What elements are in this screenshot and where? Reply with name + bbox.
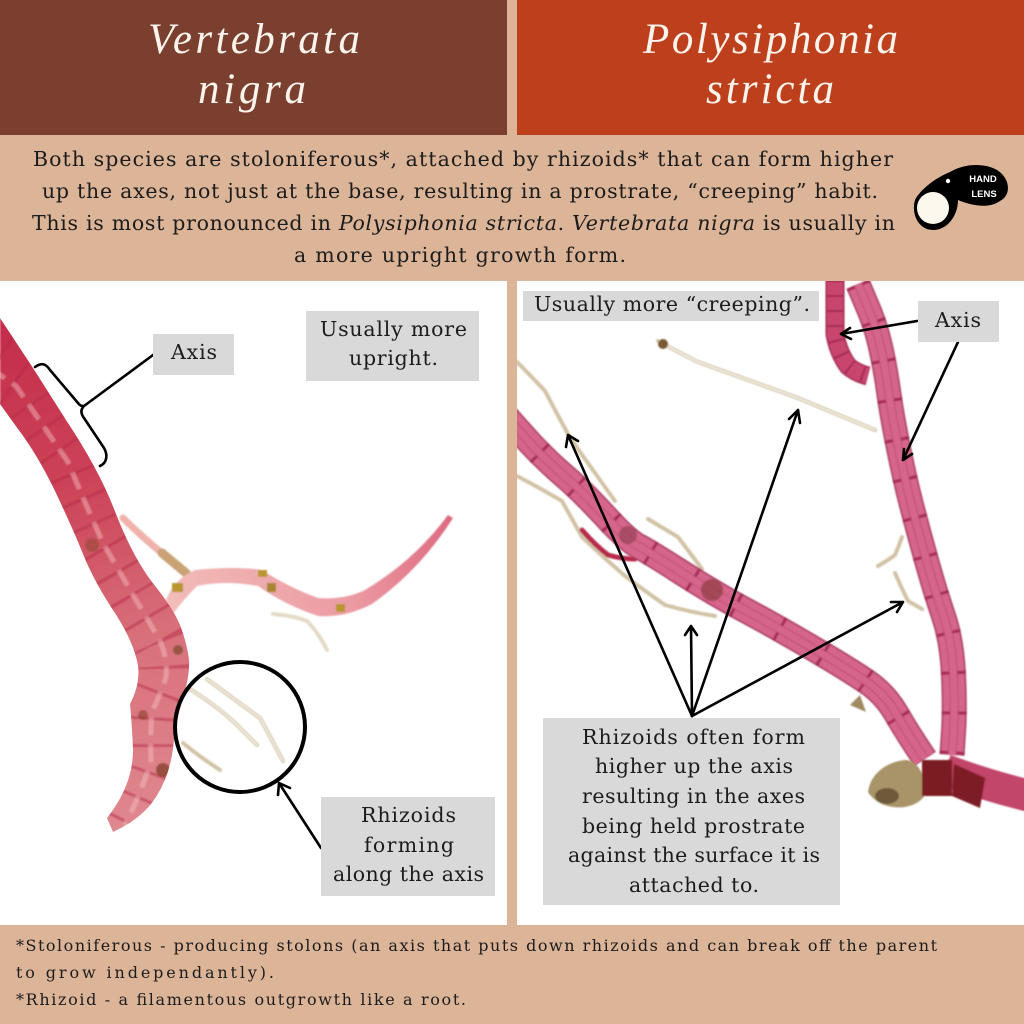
label: rhizoids often form higher <box>543 718 840 905</box>
illustration: holdfast base <box>619 526 985 808</box>
callout: circle around rhizoids <box>175 662 305 792</box>
arrows: rhizoids <box>566 410 903 716</box>
intro text <box>32 147 895 267</box>
label: usually more creeping: Usually more “creeping”. <box>534 292 810 316</box>
header: Vertebrata nigra: nigra <box>198 66 306 113</box>
label: rhizoids often form higher: attached to. <box>629 873 759 897</box>
label: rhizoids forming along the axis: Rhizoids <box>361 803 456 827</box>
illustration: axes <box>505 280 1024 796</box>
intro text: Both species are stoloniferous*, attached by rhizoids* that can form higher <box>33 147 893 171</box>
label: rhizoids often form higher: Rhizoids often form <box>582 725 805 749</box>
header: Vertebrata nigra <box>0 0 507 135</box>
label: usually more upright: Usually more <box>320 317 467 341</box>
illustration: rhizoids <box>517 339 922 712</box>
label: usually more upright <box>306 311 479 381</box>
label: rhizoids often form higher: being held prostrate <box>582 814 805 838</box>
header: Polysiphonia stricta: Polysiphonia <box>642 16 898 63</box>
label: rhizoids forming along the axis: forming <box>364 833 454 857</box>
footer: glossary: to grow independantly). <box>16 963 274 982</box>
icon: hand lens: LENS <box>971 189 997 200</box>
label: rhizoids often form higher: resulting in the axes <box>582 784 805 808</box>
label: axis (right): Axis <box>934 308 981 332</box>
header: Polysiphonia stricta <box>517 0 1024 135</box>
footer: glossary: *Rhizoid - a filamentous outgrowth like a root. <box>16 990 466 1009</box>
intro text: This is most pronounced in Polysiphonia stricta. Vertebrata nigra is usually in <box>32 211 895 235</box>
icon: hand lens: HAND <box>969 174 997 185</box>
label: axis (left): Axis <box>170 340 217 364</box>
illustration: side branch and debris <box>123 515 453 770</box>
intro text: a more upright growth form. <box>294 243 626 267</box>
label: usually more upright: upright. <box>349 346 438 370</box>
arrow: to rhizoid circle <box>278 783 321 848</box>
panel: Polysiphonia stricta photo <box>505 280 1024 925</box>
header: Polysiphonia stricta: stricta <box>706 66 834 113</box>
label: rhizoids often form higher: higher up the axis <box>595 754 793 778</box>
bracket: axis <box>35 355 153 466</box>
illustration: main axis <box>0 310 200 840</box>
label: axis (right) <box>918 301 999 342</box>
arrows: axis <box>841 321 958 460</box>
label: rhizoids forming along the axis: along the axis <box>333 862 484 886</box>
label: rhizoids often form higher: against the surface it is <box>568 843 820 867</box>
label: axis (left) <box>153 334 234 375</box>
panel: Vertebrata nigra photo <box>0 281 507 925</box>
intro text: up the axes, not just at the base, resulting in a prostrate, “creeping” habit. <box>42 179 878 203</box>
header: Vertebrata nigra: Vertebrata <box>148 16 360 63</box>
footer: glossary: *Stoloniferous - producing stolons (an axis that puts down rhizoids and can break off the parent <box>16 936 938 955</box>
label: rhizoids forming along the axis <box>321 797 495 896</box>
footer: glossary <box>0 925 1024 1024</box>
icon: hand lens <box>914 165 1008 230</box>
